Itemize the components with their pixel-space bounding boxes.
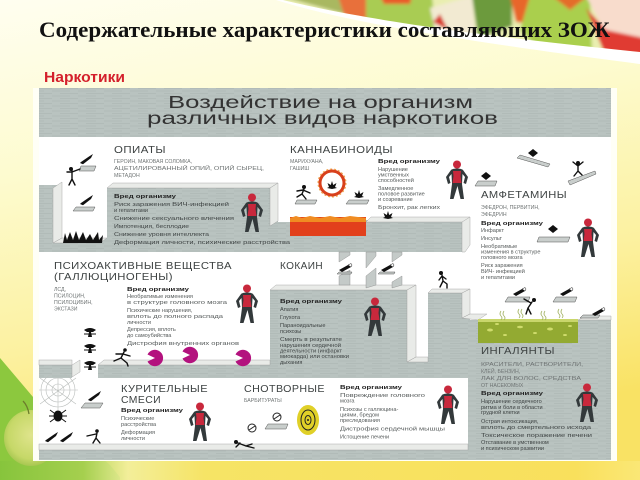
infographic poster [39,88,611,460]
panel: inhalants: вплоть до смертельного исхода [481,425,592,431]
panel: inhalants: грудной клетки [481,409,520,416]
panel: amphetamines: Инфаркт [481,228,504,234]
panel: sleeping pills: Повреждение головного [340,393,425,399]
lava pool [290,216,366,236]
icons: spider web, spider, syringes [39,373,103,443]
icon: opiates person [241,194,263,232]
panel: opiates: ГЕРОИН, МАКОВАЯ СОЛОМКА, [114,159,192,165]
panel: cannabinoids: ГАШИШ [290,166,309,172]
panel: cocaine: КОКАИН [280,261,323,272]
panel: sleeping pills: Психозы с галлюцина- [340,407,398,413]
panel: cannabinoids: Вред организму [378,159,441,165]
panel: inhalants: Отставание в умственном [481,440,549,446]
icon: cocaine person [364,298,386,336]
panel: cocaine: Вред организму [280,299,343,305]
panel: inhalants: Токсическое поражение печени [481,433,592,439]
section heading: Наркотики [44,69,125,86]
panel: sleeping pills: Истощение печени [340,434,389,440]
icons: amphetamines platforms and pills [475,149,596,242]
panel: cocaine: деятельности (инфаркт [280,348,342,354]
panel: smoking mixtures: СМЕСИ [121,395,161,406]
panel: psychoactive substances: ПСИЛОЦИН, [54,294,85,300]
panel: amphetamines: ЭФЕДРОН, ПЕРВИТИН, [481,205,540,211]
panel: psychoactive substances: ЭКСТАЗИ [54,306,78,312]
panel: amphetamines [481,190,599,281]
decorative fruit band [270,0,640,64]
panel: amphetamines: Инсульт [481,236,502,242]
panel: opiates: Вред организму [114,194,177,200]
panel: cannabinoids: умственных [378,172,409,178]
panel: psychoactive substances: до самоубийства [127,332,172,339]
panel: psychoactive substances: Дистрофия внутренних органов [127,341,239,347]
panel: inhalants: Нарушение сердечного [481,399,542,405]
icon: cannabinoids person [446,160,468,199]
panel: amphetamines: ЭФЕДРИН [481,212,507,218]
panel: cocaine: Параноидальные [280,323,325,329]
header band text: Воздействие на организм [168,92,473,112]
panel: cannabinoids: КАННАБИНОИДЫ [290,145,393,156]
panel: inhalants: КЛЕЙ, БЕНЗИН, [481,367,520,375]
decorative green corner [0,358,640,480]
panel: opiates [114,145,291,246]
cocaine connecting columns [339,252,402,288]
panel: smoking mixtures [121,384,211,442]
panel: cocaine: миокарда) или остановки [280,354,349,360]
icon: cannabis ring, figure and leaves [295,169,393,219]
panel: sleeping pills [244,384,459,440]
panel: inhalants: Вред организму [481,391,544,397]
panel: cocaine: Глухота [280,315,301,321]
panel: sleeping pills: преследования [340,418,380,424]
panel: smoking mixtures: личности [121,436,145,442]
chart: solvent pool [478,319,578,343]
panel: inhalants: КРАСИТЕЛИ, РАСТВОРИТЕЛИ, [481,362,583,368]
panel: inhalants: ритма и боли в области [481,405,543,411]
panel: opiates: Импотенция, бесплодие [114,224,189,230]
header band text [147,92,498,128]
panel: cannabinoids: Замедленное [378,186,413,192]
panel: psychoactive substances [54,261,258,347]
panel: opiates: Снижение сексуального влечения [114,216,234,222]
panel: cocaine: нарушения сердечной [280,342,341,349]
panel: opiates: АЦЕТИЛИРОВАННЫЙ ОПИЙ, ОПИЙ СЫРЕЦ, [114,164,264,172]
panel: amphetamines: Риск заражения [481,263,523,269]
panel: sleeping pills: Дистрофия сердечной мышцы [340,426,445,432]
panel: psychoactive substances: Психические нарушения, [127,308,193,314]
panel: smoking mixtures: Психические [121,416,154,422]
panel: opiates: Риск заражения ВИЧ-инфекцией [114,201,229,208]
panel: cocaine: Апатия [280,307,298,313]
panel: cannabinoids: способностей [378,177,414,184]
icons: cocaine platforms and figure [337,264,447,288]
icon: sleeping pills person [437,386,459,424]
panel: amphetamines: ВИЧ- инфекцией [481,268,525,275]
icon: smoking person [189,402,211,441]
panel: psychoactive substances: ПСИЛОЦИБИН, [54,300,93,306]
panel: psychoactive substances: (ГАЛЛЮЦИНОГЕНЫ) [54,272,173,283]
panel: cocaine: Смерть в результате [280,337,342,343]
icons: target disc, pills, lying figure [234,405,319,448]
panel: sleeping pills: Вред организму [340,385,403,391]
panel: psychoactive substances: Вред организму [127,287,190,293]
panel: amphetamines: изменения в структуре [481,250,540,256]
panel: sleeping pills: БАРБИТУРАТЫ [244,398,282,404]
icon: amphetamines person [577,218,599,257]
panel: psychoactive substances: Депрессия, вплоть [127,327,176,333]
panel: inhalants [481,346,598,452]
icon: inhalants person [576,384,598,422]
panel: psychoactive substances: личности [127,320,151,326]
panel: smoking mixtures: Деформация [121,430,155,436]
panel: sleeping pills: СНОТВОРНЫЕ [244,384,325,395]
panel: amphetamines: Необратимые [481,244,517,250]
panel: cannabinoids: Бронхит, рак легких [378,205,440,211]
panel: sleeping pills: мозга [340,398,355,404]
icons: opiates needles, figure and spikes [63,154,103,243]
panel: opiates: Деформация личности, психические расстройства [114,239,291,246]
speckled walls [39,182,611,450]
panel: cannabinoids: половое развитие [378,192,425,198]
icon: psychoactive person [236,284,258,323]
panel: opiates: ОПИАТЫ [114,145,166,156]
panel: psychoactive substances: вплоть до полного распада [127,314,224,320]
poster white frame [33,88,617,461]
panel: cannabinoids: и созревание [378,197,413,203]
panel: cannabinoids: МАРИХУАНА, [290,159,324,165]
panel: psychoactive substances: ПСИХОАКТИВНЫЕ ВЕЩЕСТВА [54,261,232,272]
panel: inhalants: ИНГАЛЯНТЫ [481,346,555,357]
icons: inhalants platforms, bottles, steam [500,288,605,320]
panel: inhalants: Острая интоксикация, [481,419,539,425]
panel: opiates: Снижение уровня интеллекта [114,232,210,238]
panel: cocaine: дыхания [280,360,302,366]
panel: sleeping pills: циями, бредом [340,412,379,418]
panel: inhalants: ЛАК ДЛЯ ВОЛОС, СРЕДСТВА [481,376,582,382]
panel: cocaine: психозы [280,329,301,335]
panel: cocaine [280,261,386,366]
panel: cannabinoids [290,145,468,211]
title: Содержательные характеристики составляющих ЗОЖ [39,17,610,42]
icon: green apple [4,401,58,466]
white background areas [39,137,611,444]
panel: opiates: МЕТАДОН [114,173,140,179]
panel: inhalants: ОТ НАСЕКОМЫХ [481,383,524,389]
panel: smoking mixtures: КУРИТЕЛЬНЫЕ [121,384,208,395]
panel: opiates: и гепатитами [114,208,148,214]
panel: smoking mixtures: расстройства [121,421,157,428]
panel: cannabinoids: Нарушение [378,167,408,173]
icons: mushrooms, runner and pacmen [84,328,251,370]
panel: inhalants: и психическом развитии [481,446,544,452]
panel: amphetamines: головного мозга [481,255,523,261]
panel: amphetamines: АМФЕТАМИНЫ [481,190,567,201]
header band text: различных видов наркотиков [147,108,498,128]
panel: amphetamines: Вред организму [481,221,544,227]
panel: psychoactive substances: Необратимые изменения [127,294,193,300]
panel: smoking mixtures: Вред организму [121,408,184,414]
panel: psychoactive substances: в структуре головного мозга [127,300,228,306]
panel: amphetamines: и гепатитами [481,275,515,281]
panel: psychoactive substances: ЛСД, [54,287,66,293]
